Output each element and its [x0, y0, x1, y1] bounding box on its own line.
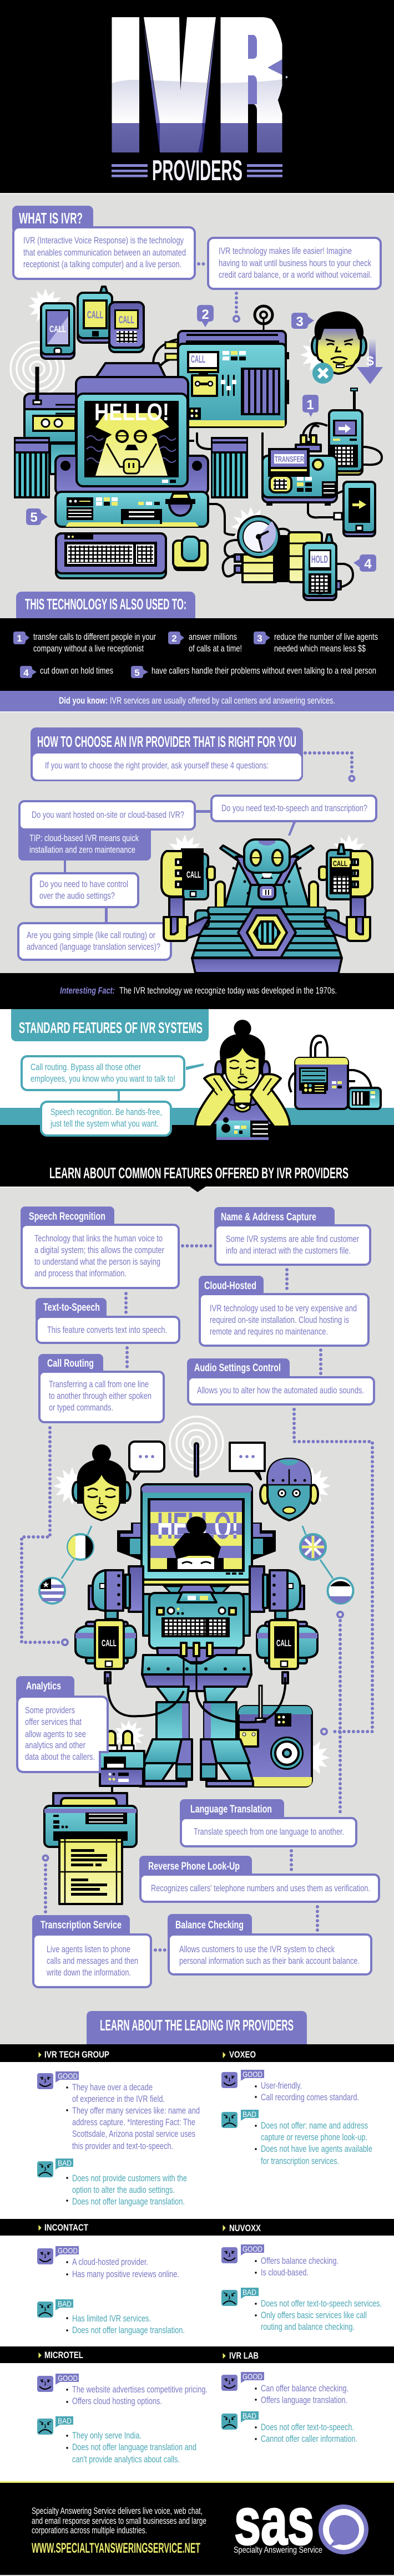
provider: IVR Tech Group — [37, 2049, 200, 2207]
good points: The website advertises competitive pricing. — [72, 2384, 208, 2395]
tag: number 3: 3 — [296, 314, 304, 329]
about text: and email response services to small businesses and large — [32, 2516, 206, 2526]
question 4: advanced (language translation services)? — [27, 941, 160, 952]
robot agent head — [260, 1459, 331, 1520]
tab label — [38, 1354, 103, 1379]
feature: speech recognition: Technology that links the human voice to — [34, 1233, 163, 1244]
tag: number 3 — [291, 313, 314, 329]
tab label: Language Translation — [190, 1804, 272, 1815]
good points: of experience in the IVR field. — [72, 2094, 165, 2104]
feature: language translation — [180, 1799, 356, 1846]
icon: machine 2 — [153, 306, 289, 427]
bad points: routing and balance checking. — [261, 2322, 355, 2332]
good points: They offer many services like: name and — [72, 2105, 200, 2116]
feature: analytics: offer services that — [25, 1717, 82, 1727]
name bar — [223, 2049, 256, 2060]
bad points: Does not offer language translation. — [72, 2325, 185, 2335]
box: call routing: employees, you know who you want to talk to! — [31, 1073, 175, 1084]
good points — [255, 2383, 348, 2405]
tab label: Balance Checking — [175, 1920, 244, 1931]
text box: benefit: IVR technology makes life easier! Imagine — [219, 246, 352, 256]
bad points — [66, 2313, 185, 2335]
good icon and label: GOOD — [243, 2244, 262, 2253]
website url: WWW.SPECIALTYANSWERINGSERVICE.NET — [32, 2541, 200, 2556]
illustration: phones and call machines — [11, 287, 383, 600]
name bar: INCONTACT — [44, 2222, 88, 2233]
good icon and label — [221, 2372, 264, 2391]
list: five uses — [13, 632, 378, 678]
icon: keyboard — [56, 533, 166, 578]
bad points: Does not offer language translation. — [72, 2196, 185, 2207]
small console — [216, 1117, 269, 1140]
tab label — [180, 1799, 284, 1824]
icon: phone 1 — [41, 303, 74, 359]
about text — [32, 2506, 206, 2536]
provider: Voxeo — [221, 2049, 372, 2166]
heading: standard features: STANDARD FEATURES OF IVR SYSTEMS — [19, 1019, 203, 1036]
good points: Scottsdale, Arizona postal service uses — [72, 2129, 195, 2139]
callout: interesting fact: Interesting Fact: — [60, 985, 115, 996]
tab label: Analytics — [26, 1681, 61, 1692]
item 3: needed which means less $$ — [274, 643, 366, 654]
icon: transfer device — [262, 432, 337, 506]
tag: number 5: 5 — [30, 510, 38, 525]
feature: call routing: to another through either spoken — [49, 1391, 151, 1401]
question 3: over the audio settings? — [39, 890, 115, 901]
base and stripes — [192, 908, 342, 973]
left radio and fans — [14, 368, 248, 498]
monitor screen: HELLO! — [157, 1505, 239, 1547]
bad icon and label: BAD — [243, 2110, 256, 2119]
text box: benefit — [208, 238, 381, 289]
feature: cloud-hosted: remote and requires no maintenance. — [210, 1326, 328, 1337]
good icon and label — [37, 2071, 79, 2089]
question 3 — [31, 873, 138, 907]
tab label: Transcription Service — [41, 1920, 122, 1931]
bad points — [255, 2298, 382, 2332]
name bar: IVR LAB — [229, 2350, 259, 2361]
small device with bulbs — [100, 1720, 144, 1786]
title: IVR Providers: R — [224, 5, 276, 165]
callout: did you know: Did you know: — [59, 695, 108, 706]
arms — [89, 1566, 143, 1619]
text box: definition — [13, 227, 195, 279]
tab label — [16, 1676, 74, 1704]
bad icon and label: BAD — [58, 2158, 72, 2167]
box: call routing — [22, 1056, 184, 1090]
woman agent head — [53, 1444, 130, 1520]
bad icon and label: BAD — [243, 2288, 256, 2297]
good points: Call recording comes standard. — [261, 2092, 359, 2102]
tab label: Cloud-Hosted — [204, 1280, 256, 1292]
good icon and label: GOOD — [58, 2071, 78, 2080]
feature: reverse phone look-up — [139, 1856, 379, 1902]
name bar: VOXEO — [229, 2049, 256, 2060]
item 1: 1 — [17, 633, 22, 644]
bad points — [66, 2173, 187, 2207]
icon: central monitor with Hello: HELLO! — [94, 399, 169, 426]
logo: SAS: sas — [234, 2485, 314, 2559]
tab label — [214, 1207, 335, 1232]
good points — [66, 2257, 179, 2279]
feature: analytics — [16, 1676, 108, 1772]
name bar — [223, 2223, 261, 2233]
feature: analytics: Some providers — [25, 1705, 75, 1715]
good icon and label: GOOD — [243, 2372, 262, 2381]
bad points: option to alter the audio settings. — [72, 2185, 175, 2195]
torso and keyboard — [143, 1586, 250, 1648]
item 2: answer millions — [189, 632, 237, 642]
feature: analytics: data about the callers. — [25, 1752, 95, 1762]
question 2 — [211, 796, 376, 821]
good points — [66, 2384, 208, 2406]
bad icon and label — [221, 2110, 259, 2128]
tip box: TIP: cloud-based IVR means quick — [29, 833, 139, 843]
feature: text-to-speech — [36, 1298, 179, 1343]
bad points: can't provide analytics about calls. — [72, 2454, 180, 2465]
icon: mouse — [173, 537, 208, 571]
feature: speech recognition: a digital system; this allows the computer — [34, 1245, 164, 1255]
good points: address capture. *Interesting Fact: The — [72, 2117, 195, 2127]
footer — [32, 2485, 368, 2559]
bad icon and label: BAD — [58, 2416, 72, 2425]
translation flags — [39, 1526, 93, 1603]
good icon and label — [37, 2246, 79, 2264]
illustration: robot with phones — [161, 834, 372, 973]
item 2: of calls at a time! — [189, 643, 242, 654]
good icon and label: GOOD — [243, 2070, 262, 2079]
good points: Is cloud-based. — [261, 2267, 309, 2278]
item 4: cut down on hold times — [40, 665, 113, 676]
tab label — [36, 1298, 107, 1323]
heading: learn about common features — [49, 1164, 348, 1192]
item 4: 4 — [23, 668, 29, 678]
tab label — [168, 1914, 252, 1942]
good points: this provider and text-to-speech. — [72, 2141, 173, 2151]
tab label: Audio Settings Control — [194, 1362, 281, 1374]
feature: text-to-speech: This feature converts text into speech. — [47, 1325, 167, 1335]
icon: phone 2 — [78, 287, 112, 343]
name bar: IVR TECH GROUP — [44, 2049, 109, 2060]
panel: how to choose — [31, 727, 303, 781]
shoulders — [117, 1523, 276, 1561]
name bar: MICROTEL — [44, 2350, 83, 2360]
head — [244, 839, 290, 879]
feature: transcription service — [32, 1915, 151, 1987]
speech bubbles — [129, 1442, 164, 1479]
icon: phone with arrow — [308, 482, 375, 536]
item 1 — [13, 632, 156, 654]
good points: Offers language translation. — [261, 2395, 347, 2405]
item 2: 2 — [171, 633, 177, 644]
good points: A cloud-hosted provider. — [72, 2257, 148, 2267]
text box: definition: IVR (Interactive Voice Response) is the technology — [23, 235, 184, 246]
bad icon and label: BAD — [58, 2299, 72, 2308]
printer — [44, 1786, 137, 1904]
item 5: 5 — [134, 668, 140, 678]
icon: hold phone — [304, 534, 353, 600]
bad points: Does not provide customers with the — [72, 2173, 187, 2183]
about text: Specialty Answering Service delivers live voice, web chat, — [32, 2506, 203, 2516]
heading tab: this technology — [0, 592, 394, 623]
about text: corporations across multiple industries. — [32, 2525, 147, 2536]
tab label — [187, 1358, 290, 1383]
word: PROVIDERS: PROVIDERS — [152, 155, 243, 187]
good points: Offers balance checking. — [261, 2256, 339, 2266]
bad points: for transcription services. — [261, 2156, 339, 2166]
provider: IVR Lab — [221, 2350, 357, 2444]
question 3: Do you need to have control — [39, 879, 128, 889]
box: speech recognition — [41, 1102, 171, 1136]
heading: standard features — [11, 1009, 209, 1041]
illustration: giant robot call center: CALL — [276, 1638, 291, 1648]
feature: call routing: or typed commands. — [49, 1402, 113, 1413]
tab label: Call Routing — [47, 1358, 94, 1370]
item 2 — [168, 632, 242, 654]
left hand and phone — [161, 848, 215, 941]
good points: Has many positive reviews online. — [72, 2269, 179, 2279]
feature: audio settings control — [187, 1358, 374, 1404]
item 1: company without a live receptionist — [33, 643, 144, 654]
question 1 — [19, 801, 195, 829]
title: IVR Providers: I — [115, 5, 135, 165]
feature: balance checking — [168, 1914, 371, 1974]
good points: User-friendly. — [261, 2080, 302, 2091]
feature: speech recognition: to understand what the person is saying — [34, 1256, 160, 1267]
bad points — [255, 2422, 357, 2444]
tab label: Speech Recognition — [29, 1211, 105, 1223]
feature: transcription service: Live agents listen to phone — [47, 1944, 130, 1954]
item 1: transfer calls to different people in your — [33, 632, 156, 642]
translation flags: ★ — [42, 1580, 49, 1590]
text: ask these questions: If you want to choose the right provider, ask yourself these 4 questions: — [45, 760, 269, 771]
monitor screen: HELLO! — [157, 1505, 239, 1547]
tag: number 2: 2 — [201, 307, 209, 322]
icon: phone 1: CALL — [49, 324, 66, 334]
feature: speech recognition — [21, 1206, 179, 1288]
bad points: Does not offer text-to-speech. — [261, 2422, 354, 2432]
bad icon and label — [37, 2299, 73, 2318]
question 1: Do you want hosted on-site or cloud-based IVR? — [32, 810, 184, 820]
box: speech recognition: just tell the system what you want. — [50, 1118, 159, 1129]
panel: standard features — [11, 1009, 209, 1136]
feature: transcription service: calls and messages and then — [47, 1956, 138, 1966]
icon: walkie device — [302, 388, 382, 475]
provider: Nuvoxx — [221, 2223, 382, 2332]
chest hexagon — [238, 908, 296, 958]
good points: Can offer balance checking. — [261, 2383, 348, 2394]
tag: number 2 — [197, 305, 214, 327]
good icon and label: GOOD — [58, 2374, 78, 2382]
title: IVR Providers: V — [154, 9, 202, 150]
tab label: Reverse Phone Look-Up — [148, 1861, 240, 1872]
name bar: NUVOXX — [229, 2223, 261, 2233]
heading tab: this technology: THIS TECHNOLOGY IS ALSO USED TO: — [25, 595, 186, 613]
panel: questions — [18, 796, 376, 960]
left hand and phone: CALL — [186, 869, 201, 880]
good icon and label — [221, 2244, 264, 2263]
tab heading: what is IVR: WHAT IS IVR? — [19, 210, 83, 227]
legs and feet — [140, 1687, 192, 1786]
box: speech recognition: Speech recognition. Be hands-free, — [50, 1107, 162, 1117]
callout: did you know — [59, 695, 335, 706]
text box: definition: that enables communication between an automated — [23, 247, 186, 258]
bad icon and label — [37, 2416, 73, 2435]
tag: number 4 — [353, 554, 376, 572]
icon: phone 3: CALL — [119, 314, 134, 325]
tip box: installation and zero maintenance — [29, 844, 135, 855]
question 4 — [18, 923, 171, 960]
illustration: woman agent at console — [195, 1020, 381, 1140]
wire from console to clock — [208, 504, 240, 535]
good icon and label: GOOD — [58, 2246, 78, 2255]
text box: definition: receptionist (a talking computer) and a live person. — [23, 259, 181, 269]
item 3 — [254, 632, 378, 654]
agent head with headset and cost arrow — [300, 311, 383, 384]
tab label — [21, 1206, 114, 1231]
feature: balance checking: Allows customers to use the IVR system to check — [179, 1944, 335, 1954]
callout: interesting fact — [60, 985, 337, 996]
feature: transcription service: write down the information. — [46, 1967, 131, 1978]
bad icon and label: BAD — [243, 2411, 256, 2420]
tab label — [139, 1856, 252, 1881]
title: IVR Providers — [112, 17, 287, 181]
bad icon and label — [37, 2158, 73, 2177]
torso — [225, 857, 309, 907]
tab label: Text-to-Speech — [43, 1302, 100, 1314]
feature: analytics: allow agents to see — [25, 1729, 86, 1739]
tip box — [18, 815, 151, 861]
icon: cancel X — [312, 363, 334, 384]
bad icon and label — [221, 2288, 259, 2306]
bad points: Does not offer language translation and — [72, 2442, 196, 2452]
icon: transfer device: TRANSFER — [275, 455, 304, 464]
good points — [255, 2080, 359, 2102]
feature: name and address capture — [214, 1207, 370, 1265]
icon: phone 3 — [109, 302, 144, 352]
panel: what is IVR — [12, 206, 381, 322]
tab label: Name & Address Capture — [221, 1211, 316, 1223]
good points — [255, 2256, 339, 2278]
feature: analytics: analytics and other — [25, 1740, 85, 1750]
pelvis — [142, 1643, 251, 1705]
name bar — [223, 2350, 259, 2361]
logo: SAS: Specialty Answering Service — [234, 2546, 322, 2555]
icon: clock and batteries — [223, 507, 322, 582]
icon: central monitor with Hello — [55, 363, 208, 527]
provider: Microtel — [37, 2350, 208, 2465]
box: call routing: Call routing. Bypass all those other — [31, 1062, 141, 1072]
bad points — [66, 2430, 196, 2465]
icon: hold phone: HOLD — [311, 554, 328, 565]
tag: number 4: 4 — [364, 557, 372, 572]
good points: Offers cloud hosting options. — [72, 2396, 162, 2406]
tag: number 1: 1 — [306, 398, 314, 413]
bad points: They only serve India. — [72, 2430, 142, 2441]
speaker device — [239, 1686, 330, 1786]
item 4 — [20, 665, 113, 678]
good icon and label — [221, 2070, 264, 2088]
icon: phone 2: CALL — [87, 309, 103, 320]
question 4: Are you going simple (like call routing) or — [27, 930, 155, 940]
icon: machine 2: CALL — [191, 354, 205, 365]
tab heading: what is IVR — [12, 206, 93, 233]
bad icon and label — [221, 2411, 259, 2430]
good icon and label — [37, 2374, 79, 2392]
bad points — [255, 2120, 372, 2166]
feature: call routing: Transferring a call from one line — [49, 1379, 149, 1389]
feature: call routing — [38, 1354, 164, 1422]
tag: number 1 — [302, 395, 319, 417]
good points: They have over a decade — [72, 2082, 153, 2093]
bad points: Cannot offer caller information. — [261, 2434, 357, 2444]
feature: cloud-hosted: required on-site installation. Cloud hosting is — [210, 1315, 349, 1325]
illustration: giant robot call center: CALL — [102, 1638, 117, 1648]
item 3: 3 — [257, 633, 262, 644]
agent head with headset and cost arrow: $ — [366, 354, 374, 369]
illustration: giant robot call center — [39, 1417, 353, 1904]
hands with phones — [75, 1620, 136, 1683]
right hand and phone — [319, 844, 372, 941]
feature: name and address capture: info and interact with the customers file. — [226, 1245, 351, 1256]
provider: InContact — [37, 2222, 185, 2335]
feature: speech recognition: and process that information. — [34, 1268, 127, 1279]
bad points: Has limited IVR services. — [72, 2313, 151, 2324]
right hand and phone: CALL — [333, 859, 347, 868]
feature: cloud-hosted — [199, 1276, 368, 1346]
monitor screen — [142, 1484, 252, 1585]
tab label — [199, 1276, 264, 1301]
good points — [66, 2082, 200, 2151]
tag: number 5 — [26, 508, 48, 525]
feature: language translation: Translate speech from one language to another. — [194, 1826, 344, 1837]
heading: leading providers — [87, 2011, 307, 2044]
tab label — [32, 1915, 130, 1943]
